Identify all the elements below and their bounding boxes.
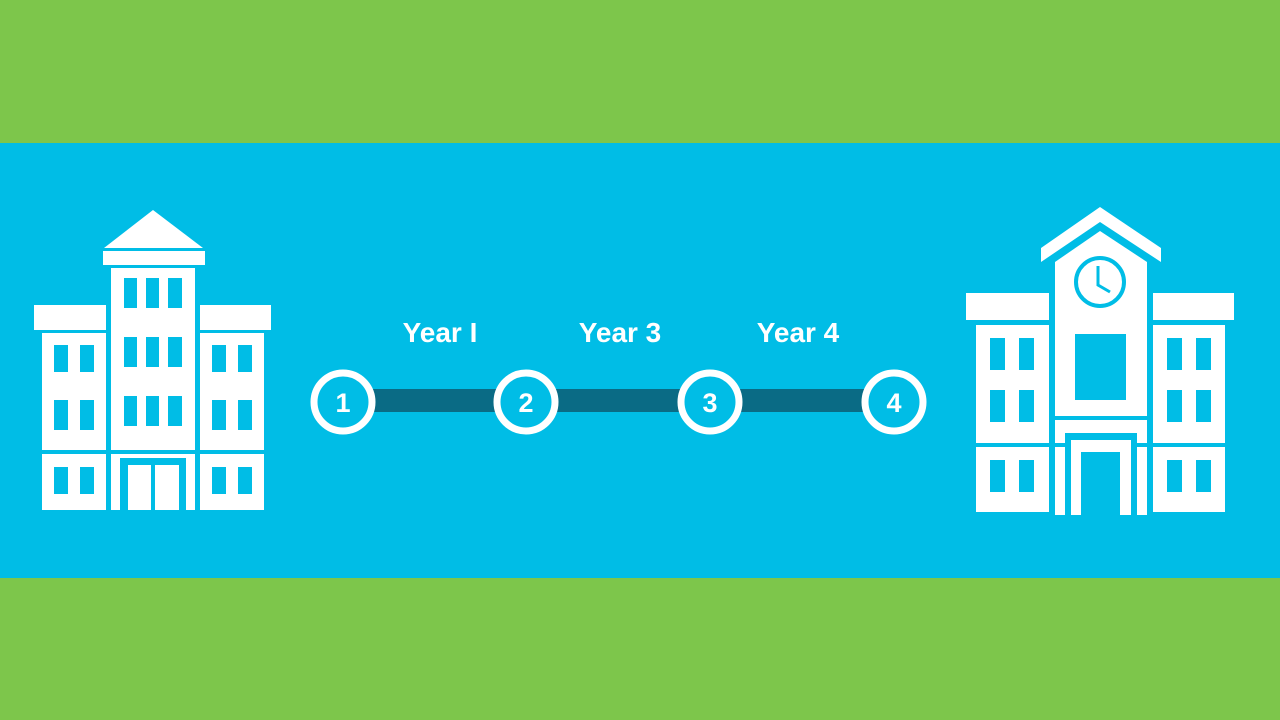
- timeline step 4: [865, 373, 923, 431]
- timeline step 4: 4: [886, 388, 902, 418]
- timeline step 2: [497, 373, 555, 431]
- label: Year 3: Year 3: [579, 317, 661, 348]
- icon: right school building with clock: [966, 207, 1234, 515]
- timeline step 3: 3: [702, 388, 718, 418]
- timeline step 3: [681, 373, 739, 431]
- timeline bar: [343, 389, 894, 412]
- timeline step 2: 2: [518, 388, 534, 418]
- blue band: [0, 143, 1280, 578]
- label: Year I: Year I: [403, 317, 477, 348]
- timeline step 1: [314, 373, 372, 431]
- timeline step 1: 1: [335, 388, 351, 418]
- icon: left building: [34, 210, 271, 510]
- label: Year 4: Year 4: [757, 317, 840, 348]
